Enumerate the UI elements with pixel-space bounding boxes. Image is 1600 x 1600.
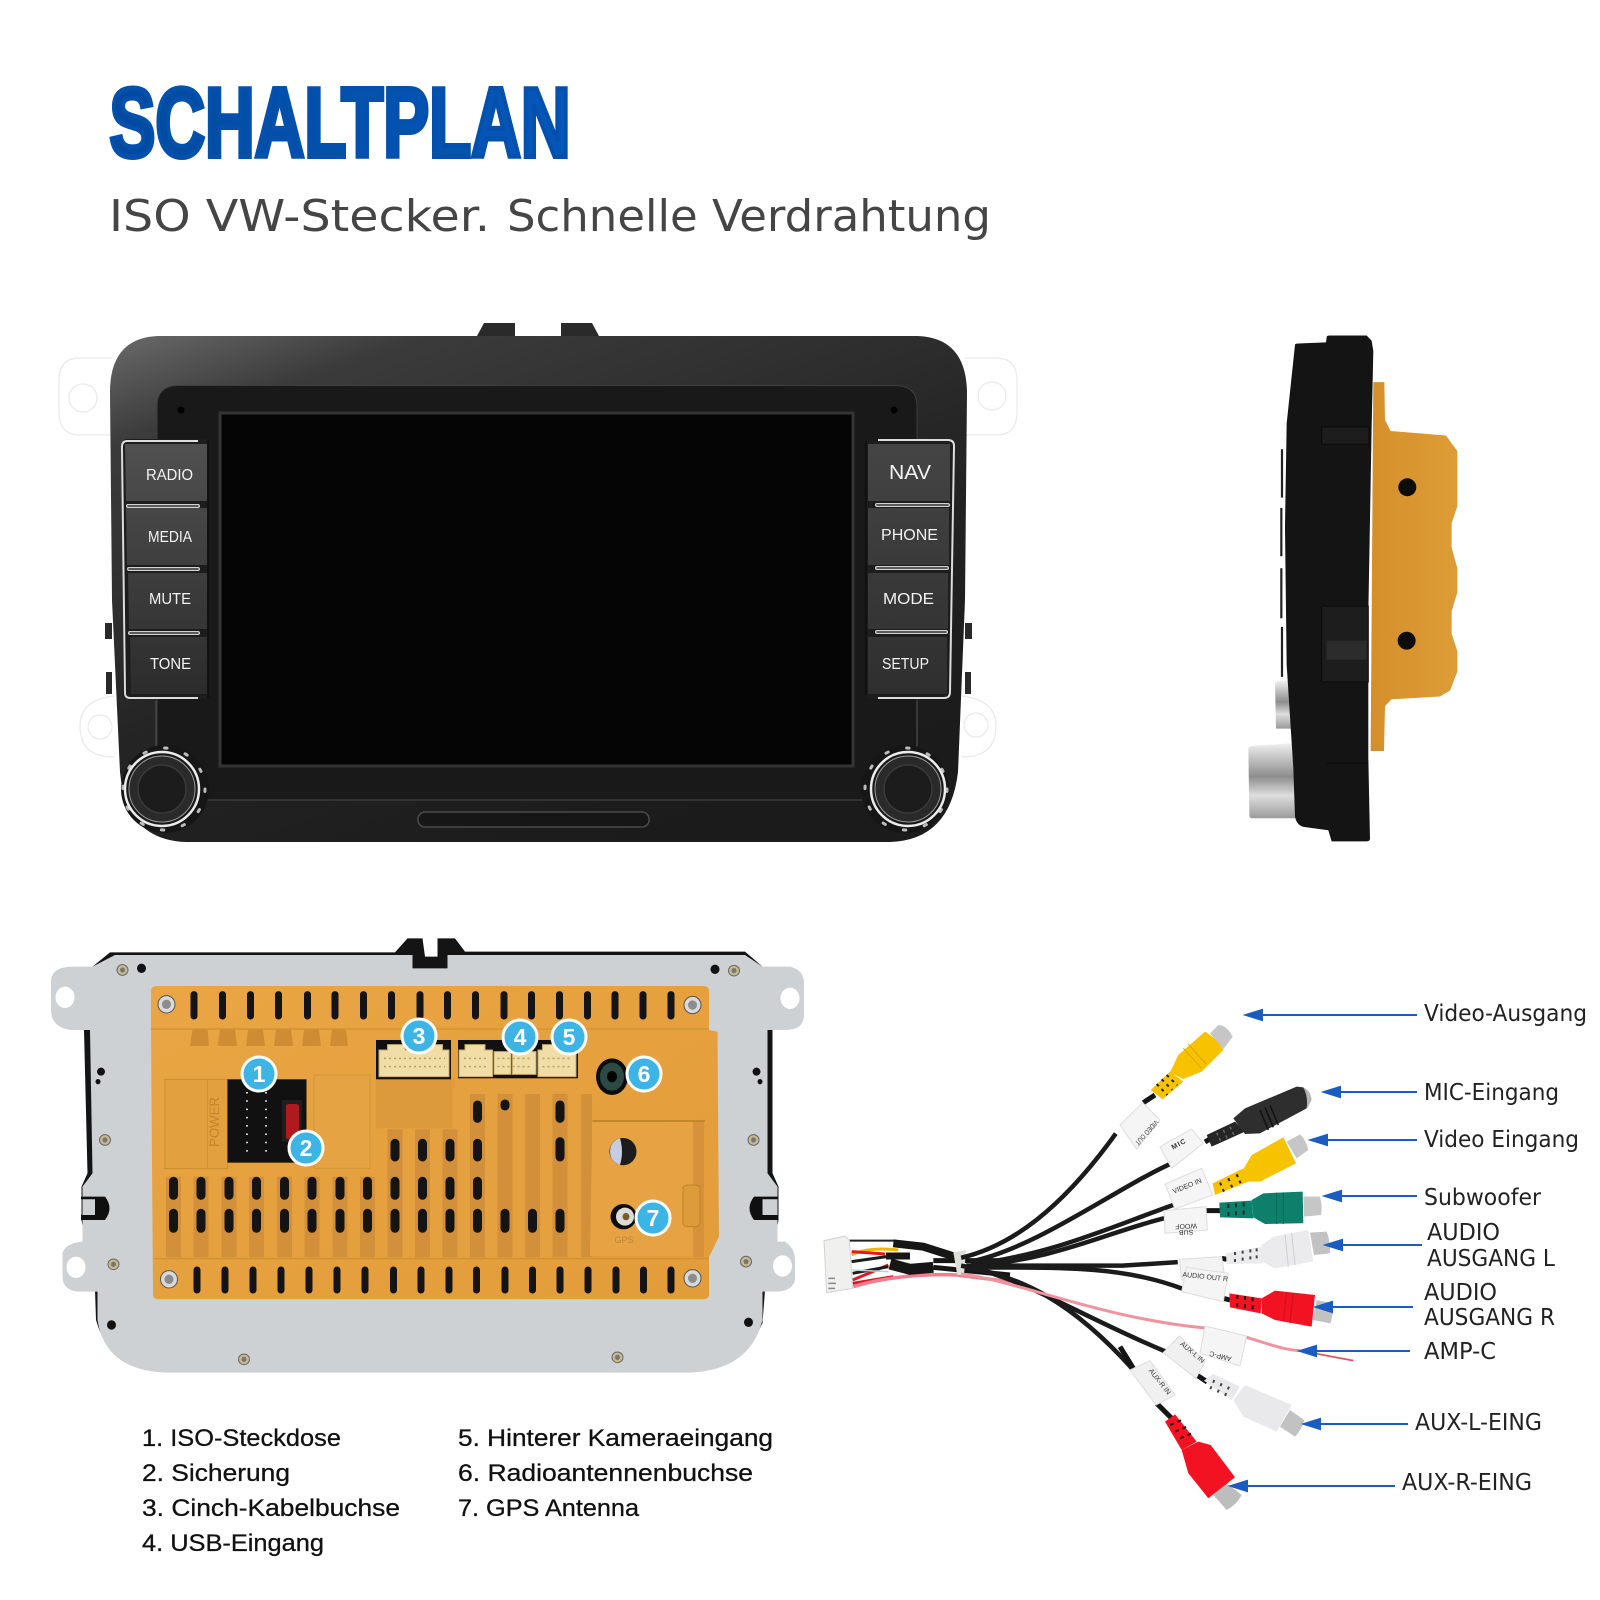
plate holes [96,964,762,1330]
right buttons: NAV [889,462,932,484]
numbered badges [242,1019,670,1235]
iso socket [228,1079,306,1163]
numbered badges: 2 [300,1135,312,1161]
ventilation slots [194,995,671,1290]
right buttons: MODE [883,591,934,608]
label: AUX-R-EING: AUX-R-EING [1402,1470,1532,1496]
chassis screws [158,996,701,1288]
legend list: column 1: 3. Cinch-Kabelbuchse [142,1495,400,1522]
metal plate [51,955,804,1373]
arrow: Audio Ausgang R [1316,1302,1413,1312]
right buttons: PHONE [881,527,938,544]
mounting holes [56,987,800,1278]
radio antenna jack [596,1058,628,1095]
gps label: GPS [614,1235,634,1245]
rear vent slots [174,1104,560,1228]
label: MIC-Eingang: MIC-Eingang [1424,1080,1559,1106]
label: Audio Ausgang L [1427,1220,1555,1272]
rear camera capacitor [610,1138,636,1165]
sensor dots [178,406,184,414]
connector: aux right red [1165,1414,1242,1510]
left buttons [122,439,208,699]
sticker texts: WOOF [1175,1222,1197,1229]
device body [110,336,967,842]
numbered badges: 4 [514,1024,527,1050]
arrow: AMP-C [1300,1346,1410,1356]
sticker: sub woof [1164,1207,1207,1233]
sticker texts: SUB [1178,1228,1193,1235]
power label: POWER [206,1097,222,1147]
arrow: Video-Ausgang [1246,1010,1417,1020]
cream connectors [376,1040,578,1079]
label: AMP-C: AMP-C [1424,1339,1496,1365]
label: Video Eingang: Video Eingang [1424,1127,1579,1153]
legend list: column 1 [142,1425,400,1557]
side button edges [1280,449,1283,677]
numbered badges: 6 [638,1061,650,1087]
legend list: column 2: 7. GPS Antenna [458,1495,639,1522]
subtitle: Schnelle Verdrahtung [507,191,991,242]
amp wire end [1247,1337,1300,1351]
pink amp wire [961,1274,1205,1328]
sticker texts: MIC [1171,1138,1188,1151]
connector: aux left white [1204,1374,1304,1437]
sticker: mic [1160,1129,1203,1168]
label: Audio Ausgang L: AUDIO [1427,1220,1500,1246]
subtitle: ISO VW-Stecker. [109,191,490,242]
black housing [1285,336,1373,841]
plate side notches [81,1197,778,1220]
connector: subwoofer green [1219,1192,1322,1224]
heatsink holes [1398,478,1416,496]
right buttons [866,440,954,699]
legend list: column 2: 5. Hinterer Kameraeingang [458,1425,773,1452]
left buttons: MUTE [149,591,191,608]
plug and leads [824,1236,1010,1293]
sticker texts [1133,1118,1232,1396]
label: AUX-L-EING: AUX-L-EING [1415,1410,1542,1436]
left buttons: RADIO [146,467,193,484]
gps connector [610,1204,636,1229]
connector recess [376,1079,455,1128]
lower connectors [1120,1230,1353,1510]
sticker: amp-c [1200,1326,1247,1366]
screen [220,413,853,766]
fuse [282,1100,302,1142]
sticker texts: AUDIO OUT R [1182,1272,1228,1283]
panel: side view of head unit [1248,336,1457,841]
upper connectors [1120,1025,1322,1233]
connector: mic black [1207,1087,1312,1147]
legend list: column 2: 6. Radioantennenbuchse [458,1460,753,1487]
ghost mounting tabs [59,358,1017,757]
power socket recess [165,1079,228,1169]
connector: video in yellow [1213,1134,1308,1195]
left knob [121,745,209,833]
arrow: AUX-L-EING [1304,1419,1408,1429]
numbered badges: 1 [253,1061,266,1087]
panel: rear view of head unit [51,938,804,1373]
top lugs and side clips [105,323,972,694]
numbered badges: 7 [647,1205,659,1231]
right buttons: SETUP [882,656,929,673]
arrow: MIC-Eingang [1324,1087,1417,1097]
sticker texts: AUX-L IN [1178,1341,1205,1365]
sticker: aux-r in [1130,1361,1175,1405]
sticker texts: AUX-R IN [1147,1368,1171,1396]
top tabs [190,1029,348,1046]
orange heatsink [1371,382,1457,751]
side knob [1248,742,1307,818]
arrow: Audio Ausgang L [1326,1240,1422,1250]
connector: audio left white [1226,1230,1330,1268]
right recess [590,1121,693,1256]
sticker: audio out l [1179,1257,1224,1280]
arrow: AUX-R-EING [1231,1481,1395,1491]
legend list: column 1: 2. Sicherung [142,1460,290,1487]
legend list: column 1: 4. USB-Eingang [142,1530,324,1557]
connector: video out yellow [1151,1025,1233,1099]
panel: front view of head unit [59,323,1017,842]
label: Subwoofer: Subwoofer [1424,1185,1542,1211]
sticker: audio out r [1182,1267,1228,1302]
plate screws [100,965,759,1365]
title: SCHALTPLAN [110,68,570,178]
sticker texts: VIDEO OUT [1133,1118,1159,1146]
right knob [861,745,949,833]
sticker texts: AMP-C [1209,1349,1232,1362]
arrow: Video Eingang [1311,1135,1417,1145]
legend list: column 1: 1. ISO-Steckdose [142,1425,341,1452]
sticker: aux-l in [1163,1336,1205,1378]
arrow: Subwoofer [1325,1191,1417,1201]
sticker: video in [1165,1168,1213,1209]
sticker: video out [1120,1103,1160,1149]
legend list: column 2 [458,1425,773,1522]
label: Audio Ausgang R: AUSGANG R [1424,1305,1555,1331]
label: Audio Ausgang R [1424,1280,1555,1331]
panel: cable harness [824,1025,1353,1510]
label: Audio Ausgang R: AUDIO [1424,1280,1497,1306]
numbered badges: 5 [563,1024,576,1050]
connector: audio right red [1229,1291,1333,1327]
disc slot [418,812,649,827]
inner bezel [157,386,917,800]
subtitle [109,191,991,242]
black housing behind plate [82,938,778,1372]
black wires [961,1134,1183,1370]
left buttons: MEDIA [148,529,193,546]
label: Video-Ausgang: Video-Ausgang [1424,1001,1587,1027]
left buttons: TONE [150,656,191,673]
numbered badges: 3 [413,1023,425,1049]
orange chassis [151,986,719,1299]
label: Audio Ausgang L: AUSGANG L [1427,1246,1555,1272]
fin frames [166,1094,592,1257]
sticker texts: VIDEO IN [1172,1178,1203,1196]
